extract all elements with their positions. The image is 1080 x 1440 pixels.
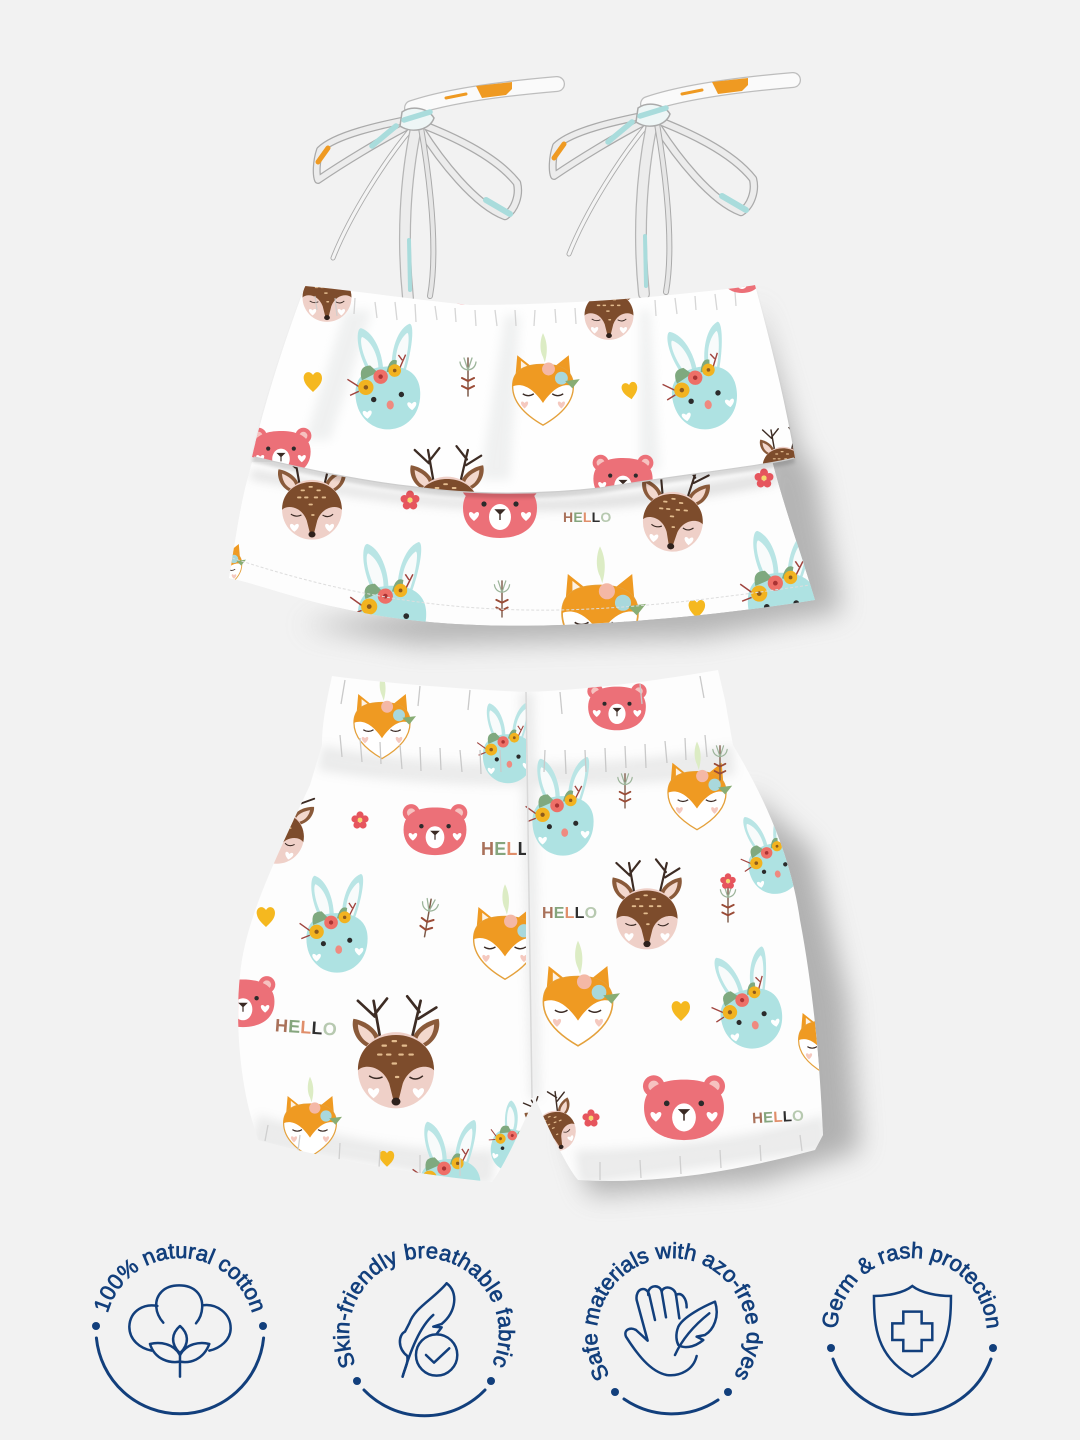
print: HELLO lettering: HELLO — [481, 839, 543, 859]
shorts body — [238, 670, 823, 1182]
badge dots — [827, 1344, 997, 1352]
print: bunny near inseam — [480, 1096, 547, 1177]
print: bunny face — [350, 542, 426, 622]
print: large deer face — [353, 996, 439, 1108]
badge arc — [364, 1390, 485, 1416]
badge text: Safe materials with azo-free dyes — [582, 1242, 763, 1380]
badge text: Germ & rash protection — [822, 1242, 998, 1328]
print: sprig — [460, 358, 476, 396]
print: bunny face — [732, 806, 806, 900]
print: antlers — [760, 426, 795, 464]
print: bear face — [587, 683, 647, 730]
print: deer face — [642, 474, 710, 552]
tie strap right — [553, 78, 793, 294]
top garment shadow — [300, 300, 842, 645]
print: heart — [672, 1001, 690, 1021]
print: bear edge — [211, 976, 275, 1027]
badge: germ and rash protection — [822, 1242, 998, 1416]
waistband gathers — [340, 676, 707, 774]
print: antlers — [410, 445, 484, 492]
hem stitching — [232, 558, 810, 610]
shorts shadow — [570, 790, 860, 1195]
badge: safe materials with azo-free dyes — [582, 1242, 763, 1416]
print: orange edge — [799, 994, 857, 1074]
elastic gather — [315, 292, 736, 326]
badge dots — [92, 1322, 267, 1330]
print: heart — [622, 382, 638, 400]
print: cropped bear — [728, 285, 756, 293]
print: deer face — [274, 798, 316, 864]
print: fox face — [668, 742, 732, 830]
badge arc — [833, 1359, 991, 1414]
fabric fold shading — [305, 310, 660, 480]
print: heart — [689, 600, 705, 618]
print: cropped deer — [302, 286, 352, 322]
print: bunny near hem — [413, 1120, 481, 1219]
photo: cotton bloomer shorts — [211, 670, 860, 1219]
print: heart — [257, 907, 275, 927]
center seam — [526, 692, 532, 1098]
badge text: 100% natural cotton — [94, 1244, 263, 1313]
leg elastic gathers — [265, 1125, 802, 1180]
ruffle hem stitching — [254, 457, 794, 493]
print: cropped bear — [252, 428, 312, 468]
print: sprig — [713, 746, 727, 780]
badge arc — [96, 1338, 264, 1414]
print: fox face — [543, 941, 620, 1046]
print: deer face — [278, 466, 346, 540]
badge dots — [353, 1377, 495, 1385]
print: flower stem — [720, 873, 736, 922]
print: HELLO lettering: HELLO — [274, 1015, 338, 1040]
print: bunny at seam — [477, 702, 533, 783]
print: bunny face — [526, 757, 594, 856]
print: bear face — [403, 804, 467, 855]
print: cropped bear — [457, 304, 464, 305]
print: fox face — [513, 333, 580, 425]
fabric fold shading — [250, 692, 825, 1185]
print: bear face — [463, 492, 537, 538]
print: deer face — [612, 859, 682, 949]
print: flower — [755, 469, 773, 487]
print: flower — [582, 1109, 600, 1127]
print: bear face — [643, 1075, 725, 1140]
print: HELLO lettering: HELLO — [542, 905, 597, 922]
print: fox at seam — [474, 884, 543, 979]
print: HELLO lettering: HELLO — [563, 509, 611, 525]
print: bunny face — [701, 945, 788, 1056]
badge: 100% natural cotton — [92, 1244, 267, 1416]
print: flower — [351, 811, 369, 829]
photo: cotton top with tie straps — [202, 78, 842, 661]
print: sprig — [618, 774, 632, 808]
badge arc — [624, 1399, 718, 1414]
print: bunny face — [662, 322, 737, 430]
badge: skin-friendly breathable fabric — [332, 1244, 516, 1418]
icon: hand with feather — [625, 1286, 717, 1375]
badge dots — [611, 1388, 732, 1396]
left leg prints cut by the centre seam — [413, 702, 547, 1219]
print: sprig — [494, 581, 510, 617]
icon: cotton boll — [129, 1285, 231, 1377]
print: cropped bear — [592, 454, 654, 488]
print: heart — [304, 372, 322, 392]
upper ruffle of top — [252, 285, 796, 500]
print: bunny face — [300, 874, 368, 973]
print: fox face near hem — [284, 1077, 342, 1157]
badge row — [92, 1242, 998, 1418]
tie strap left — [317, 82, 557, 298]
print: bunny face — [740, 530, 815, 610]
badge text: Skin-friendly breathable fabric — [332, 1244, 516, 1368]
print: deer near inseam — [520, 1086, 584, 1158]
lower tier of top — [229, 462, 815, 626]
print: fox edge — [230, 544, 246, 580]
print: heart — [380, 1151, 394, 1167]
print: flower — [401, 491, 419, 509]
icon: feather with check — [400, 1283, 457, 1377]
print: fox face — [354, 674, 416, 759]
icon: shield with cross — [874, 1286, 951, 1377]
print: cropped deer — [584, 298, 634, 340]
print: sprig — [417, 898, 439, 938]
print: HELLO lettering: HELLO — [752, 1107, 805, 1127]
print: fox face — [561, 546, 646, 625]
print: bunny face — [345, 323, 422, 431]
